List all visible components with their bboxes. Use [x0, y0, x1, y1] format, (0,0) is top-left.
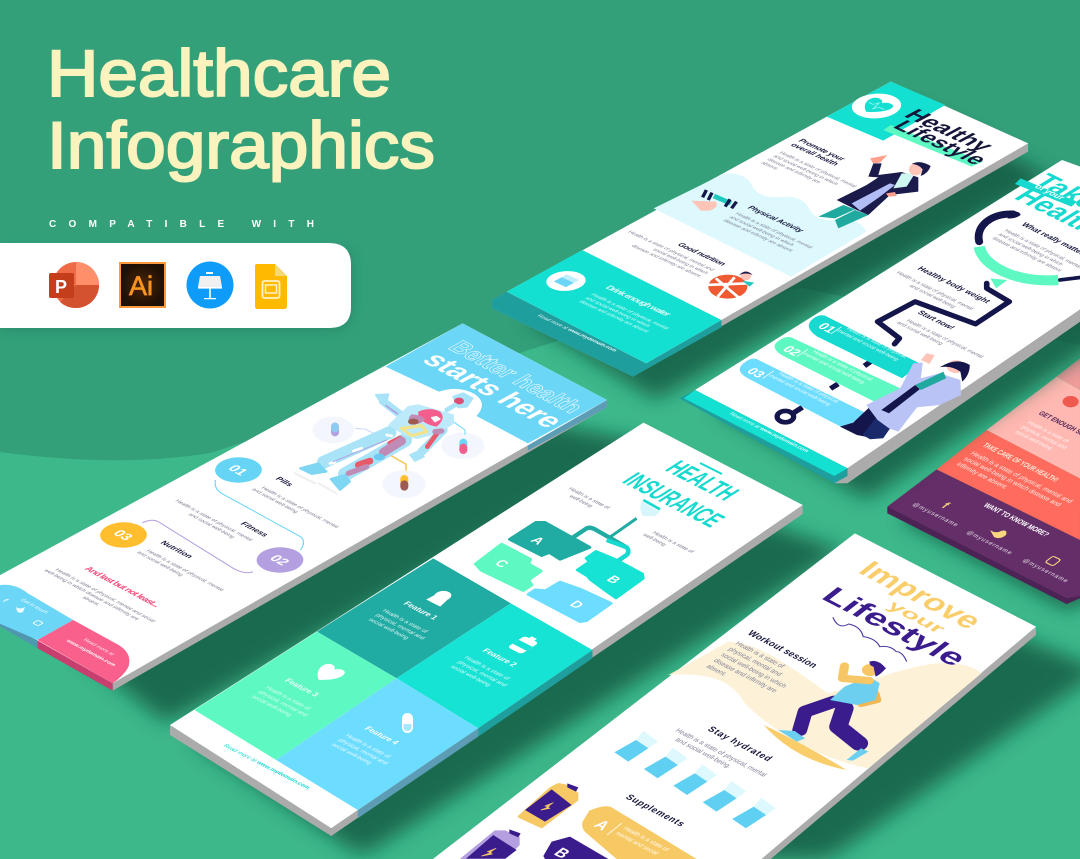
text: good nutrition: disease and infirmity are absent. [629, 244, 703, 279]
step 03 text: Health is a state of physical, [776, 372, 841, 405]
side notes: well-being [566, 494, 594, 509]
text: drink enough water: disease and infirmity are absent [577, 300, 650, 334]
text: take care of your health: social well-being in which disease and [961, 456, 1063, 508]
feature 3: Health is a state of [263, 686, 312, 711]
text: workout session: physical, mental and [726, 646, 783, 678]
text: nutrition: and social well-being [135, 551, 184, 577]
social handles [910, 502, 1070, 584]
heading: Improve your Lifestyle: Lifestyle [815, 582, 975, 671]
step 01 text: Health is a state of physical, [844, 327, 909, 360]
label A: A [590, 818, 613, 833]
numbered steps [740, 315, 921, 428]
text: what really matters: and social well-being in which [996, 233, 1064, 267]
feature 4 [329, 713, 413, 770]
step 02 text: 02 [779, 344, 805, 358]
heading: Improve your Lifestyle: your [883, 599, 949, 637]
feature 2: Health is a state of [462, 656, 511, 681]
text: workout session: Health is a state of [733, 641, 786, 670]
footer blocks [0, 585, 73, 640]
icons: supplement bottles [461, 783, 578, 859]
title: Healthcare [47, 36, 391, 110]
badge 03: 03 [110, 527, 137, 543]
panel: compatible apps [0, 243, 351, 329]
text: physical activity: Physical Activity [745, 205, 807, 234]
diagram: puzzle cross [475, 500, 660, 622]
badge 01: 01 [225, 462, 252, 478]
illustration: runner [778, 661, 886, 761]
feature 1: Feature 1 [401, 600, 440, 621]
label A: mental and social [614, 831, 660, 856]
panel: Take care of your Health card [679, 160, 1080, 500]
heading: Health Insurance [616, 456, 747, 531]
text: healthy body weight: Healthy body weight [915, 265, 993, 305]
text: fitness: and social well-being [186, 513, 236, 539]
text: pills: Health is a state of physical, mental [259, 486, 340, 529]
text: drink enough water: and social well-being in which [583, 296, 651, 328]
text: take care of your health [954, 441, 1074, 516]
title: Infographics [47, 108, 435, 182]
text: get enough sleep [1013, 409, 1080, 455]
text: physical activity: and social well-being in which [727, 215, 795, 247]
text: promote your overall health: disease and infirmity are [765, 158, 822, 184]
icon: heart badge [842, 88, 911, 124]
text: healthy body weight: Health is a state of physical, mental [894, 271, 975, 311]
illustration: female doctor [840, 353, 970, 439]
header band [1015, 178, 1077, 207]
title [47, 36, 435, 182]
icon: Illustrator: Ai [129, 271, 153, 301]
heading: Better health starts here: Better health [442, 338, 589, 417]
text: get enough sleep: Health is a state of [1025, 420, 1070, 444]
text: and last but not least: And last but not least... [82, 565, 163, 609]
step 01 text: mental and social well-being [835, 329, 900, 362]
text: good nutrition: Health is a state of physical, mental and [626, 230, 716, 272]
feature 4: Feature 4 [362, 725, 401, 746]
text: footer link: Read more at www.mydomain.com [221, 744, 311, 790]
label B [543, 837, 608, 859]
text: promote your overall health: and social well-being in which [771, 154, 839, 186]
feature 1: social well-being [366, 618, 410, 641]
panel: Health Insurance card [170, 423, 844, 857]
step 03 text: 03 [743, 366, 769, 380]
step 03 text [743, 366, 841, 408]
heading: Improve your Lifestyle: Improve [852, 556, 990, 634]
feature 4: social well-being [329, 743, 373, 766]
badge 03 [90, 517, 157, 553]
text: nutrition: Nutrition [158, 540, 195, 560]
heading: Better health starts here: starts here [415, 348, 571, 432]
text: and last but not least: Health is a state of physical, mental and social [53, 568, 157, 623]
diagram: stethoscope [777, 211, 1080, 422]
feature 4: physical, mental and [336, 738, 389, 766]
text: physical activity: disease and infirmity are absent. [721, 219, 795, 253]
text: promote your overall health [759, 138, 858, 198]
icon: water glass [538, 267, 594, 295]
text: workout session: disease and infirmity are [711, 658, 779, 694]
social handles: @myusername [910, 502, 960, 528]
text: pills: and social well-being [250, 488, 299, 514]
footer band [507, 250, 721, 363]
text: stay hydrated: and social well-being. [673, 737, 733, 770]
text: start now: Start now! [915, 309, 957, 331]
icon: dumbbell [691, 190, 736, 211]
text: promote your overall health: Promote your [796, 138, 848, 162]
feature 3 [249, 662, 348, 722]
side notes [560, 487, 695, 558]
label A: Health is a state of [621, 826, 671, 853]
text: healthy body weight: and social well-being [907, 284, 957, 309]
badge 02: 02 [266, 552, 294, 568]
text: want to know more: WANT TO KNOW MORE? [981, 501, 1052, 538]
pill bubbles [313, 417, 484, 498]
text: fitness: Health is a state of physical, mental [173, 499, 254, 542]
feature 3: Feature 3 [282, 677, 321, 698]
text: fitness: Fitness [238, 521, 271, 538]
subtitle: compatible with: COMPATIBLE WITH [49, 219, 314, 230]
text: start now [895, 309, 985, 363]
organs [418, 409, 443, 427]
icon: Illustrator [120, 263, 165, 307]
text: stay hydrated: Health is a state of physical, mental [673, 728, 768, 778]
text: get enough sleep: social well-being [1013, 430, 1053, 451]
social handles: @myusername [964, 530, 1014, 556]
text: good nutrition: social well-being in which [651, 248, 710, 275]
social handles: @myusername [1020, 558, 1070, 584]
icons: social: f [938, 501, 952, 511]
icon: Google Slides [255, 264, 287, 309]
icon: PowerPoint: P [55, 277, 67, 297]
header block [386, 323, 607, 443]
step 02 text: mental and social well-being [801, 352, 866, 385]
feature 2: Feature 2 [480, 647, 519, 668]
text: workout session: Workout session [745, 628, 821, 670]
heading: Healthy Lifestyle: Healthy [899, 106, 1000, 154]
pale wave band [654, 174, 866, 277]
panel: Healthy Lifestyle card [492, 82, 1051, 400]
text: and last but not least: well-being in which disease and infirmity are [41, 568, 140, 621]
feature 4: Health is a state of [343, 734, 392, 759]
panel: Better health card [0, 323, 652, 723]
icons: water glasses [614, 731, 776, 828]
panel: pink sleep card [887, 358, 1080, 610]
icon: apple figure [706, 271, 754, 299]
text: start now: Health is a state of physical, mental [904, 319, 985, 359]
puzzle letters: B [603, 573, 624, 586]
text: good nutrition [614, 230, 729, 279]
text: pills [250, 476, 340, 533]
text: promote your overall health: Health is a state of physical, mental [777, 151, 858, 188]
text: healthy body weight [888, 265, 993, 315]
puzzle letters: C [491, 557, 513, 570]
text: promote your overall health: overall health [788, 142, 841, 167]
torso [389, 405, 453, 438]
step 01 text [814, 321, 909, 363]
icon: PowerPoint [49, 262, 99, 308]
puzzle letters: A [527, 534, 549, 547]
feature 1: Health is a state of [380, 609, 429, 634]
step 02 text: Health is a state of physical, [810, 350, 875, 383]
text: get in touch and social icons: f [0, 598, 11, 603]
text: physical activity [721, 205, 814, 256]
text: drink enough water: Drink enough water [603, 284, 674, 318]
step 01 text: 01 [814, 321, 840, 335]
text: nutrition: Health is a state of physical, mental [144, 549, 225, 592]
text: good nutrition: Good nutrition [675, 242, 729, 267]
heading: Improve your Lifestyle [815, 556, 990, 671]
text: promote your overall health: absent. [759, 161, 780, 171]
step 03 text: mental and social well-being [767, 374, 832, 407]
puzzle letters: D [566, 598, 587, 611]
text: pills: Pills [273, 476, 296, 488]
beige hills [668, 642, 981, 768]
text: workout session: social well-being in which [719, 652, 788, 690]
pills [335, 427, 463, 487]
text: footer link: Read more at www.mydomain.com [727, 412, 810, 453]
feature 1 [366, 589, 457, 645]
text: nutrition [135, 540, 225, 596]
text: drink enough water: Health is a state of physical, mental [589, 293, 670, 330]
text: workout session [704, 628, 821, 701]
text: get enough sleep: physical, mental and [1019, 425, 1068, 451]
text: get in touch and social icons [0, 598, 49, 626]
timeline lines [142, 480, 303, 573]
feature tiles [317, 558, 511, 678]
step 02 text [779, 344, 875, 386]
feature 3: physical, mental and [256, 690, 309, 718]
text: workout session: absent. [704, 664, 729, 678]
text: supplements: Supplements [623, 792, 688, 828]
side notes: well-being [640, 532, 667, 547]
feature 2 [448, 634, 541, 692]
feature 2: physical, mental and [455, 660, 508, 688]
text: read more: www.mydomain.com [63, 639, 117, 667]
text: and last but not least: absent. [80, 596, 102, 607]
feature 2: social well-being [448, 665, 492, 688]
text: stay hydrated: Stay hydrated [705, 724, 776, 763]
side notes: Health is a state of [566, 487, 611, 511]
text: what really matters: disease and infirmity are absent [990, 236, 1063, 273]
heading: Health Insurance: INSURANCE [616, 468, 732, 531]
header block [827, 82, 945, 141]
text: get in touch and social icons: Get in touch [18, 598, 49, 615]
side notes: Health is a state of [650, 531, 695, 555]
label A [582, 806, 697, 859]
text: take care of your health: infirmity are absent. [954, 462, 1010, 491]
text: footer link: Read more at www.mydomain.com [535, 314, 618, 353]
text: physical activity: Health is a state of physical, mental [733, 212, 814, 249]
text: drink enough water [577, 284, 674, 337]
icons: social [938, 501, 1061, 566]
illustration: anatomy figure [295, 393, 484, 498]
text: take care of your health: Health is a state of physical, mental and [968, 451, 1074, 505]
text: read more: Read more at [81, 638, 116, 657]
text: what really matters [990, 221, 1080, 277]
limbs [323, 432, 390, 462]
illustration: doctor [818, 155, 931, 228]
panel: Improve your Lifestyle card [433, 533, 1080, 859]
text: start now: and social well-being [895, 321, 944, 346]
footer band [684, 390, 847, 476]
badge 02 [247, 542, 313, 578]
heading: Take of your Health: of your [1032, 183, 1068, 201]
icon: Keynote [186, 262, 234, 308]
feature 1: physical, mental and [373, 613, 426, 641]
badge 01 [205, 452, 272, 488]
heading: Healthy Lifestyle: Lifestyle [888, 117, 993, 168]
feature 3: social well-being [249, 695, 293, 718]
text: and last but not least [35, 565, 163, 630]
heading: Health Insurance: HEALTH [659, 456, 747, 504]
puzzle letters [491, 534, 624, 611]
